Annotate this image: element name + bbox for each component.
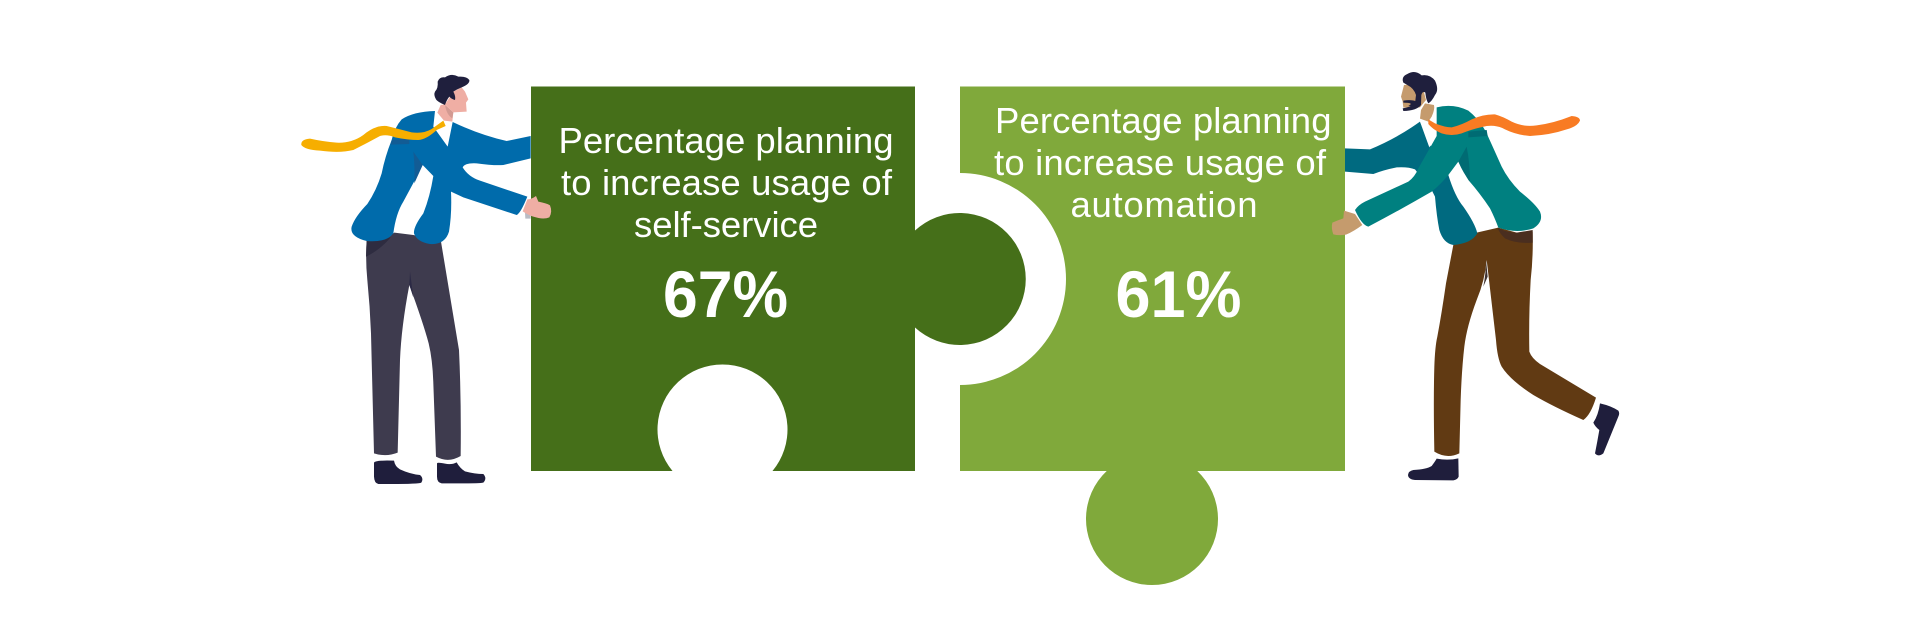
left man jacket [351,111,531,244]
left man trouser shadow [366,237,391,257]
icon: left man hand [523,196,551,219]
puzzle piece: light green [960,86,1345,585]
right man jacket band [1468,130,1488,137]
icon: right man hand [1332,211,1362,235]
left man crotch shadow [409,272,413,297]
right man hair [1403,72,1437,111]
left man jacket fold [413,152,423,183]
right man shoe front [1408,458,1459,480]
right man shirt [1420,107,1437,147]
text: automation label: Percentage planning [995,100,1332,141]
text: automation label: automation [1070,184,1258,225]
figure: left man pushing [301,75,531,484]
text: self-service label: self-service [634,204,818,245]
right man shoe back [1593,403,1619,455]
number: 61%: 61% [1116,257,1242,331]
puzzle piece: dark green [531,86,1026,471]
text: automation label: to increase usage of [994,142,1327,183]
text: self-service label [558,120,894,245]
left cuff [525,213,531,219]
left hand [523,196,551,219]
right man neck [1420,103,1434,122]
text: self-service label: to increase usage of [561,162,893,203]
right man jacket [1355,106,1541,231]
left man neck shadow [445,105,453,118]
left man trousers [366,233,461,460]
figure: right man pushing [1345,72,1619,480]
left man shoe front [374,461,422,484]
right man crotch shadow [1483,260,1488,287]
left man tie [301,121,446,152]
number: 67%: 67% [663,257,788,331]
left man hair [434,75,469,105]
left man jacket band [391,138,409,145]
right man trousers [1434,228,1596,456]
right man jacket fold [1458,147,1470,182]
right man face [1401,83,1426,108]
right man back arm and jacket panel [1345,122,1477,245]
right man tie [1428,114,1580,136]
left man shoe back [437,462,485,483]
right man trouser shadow [1497,228,1533,243]
left man neck [437,104,453,122]
right man moustache [1403,100,1418,106]
text: self-service label: Percentage planning [558,120,894,161]
left man face [445,87,468,112]
text: automation label [994,100,1332,225]
